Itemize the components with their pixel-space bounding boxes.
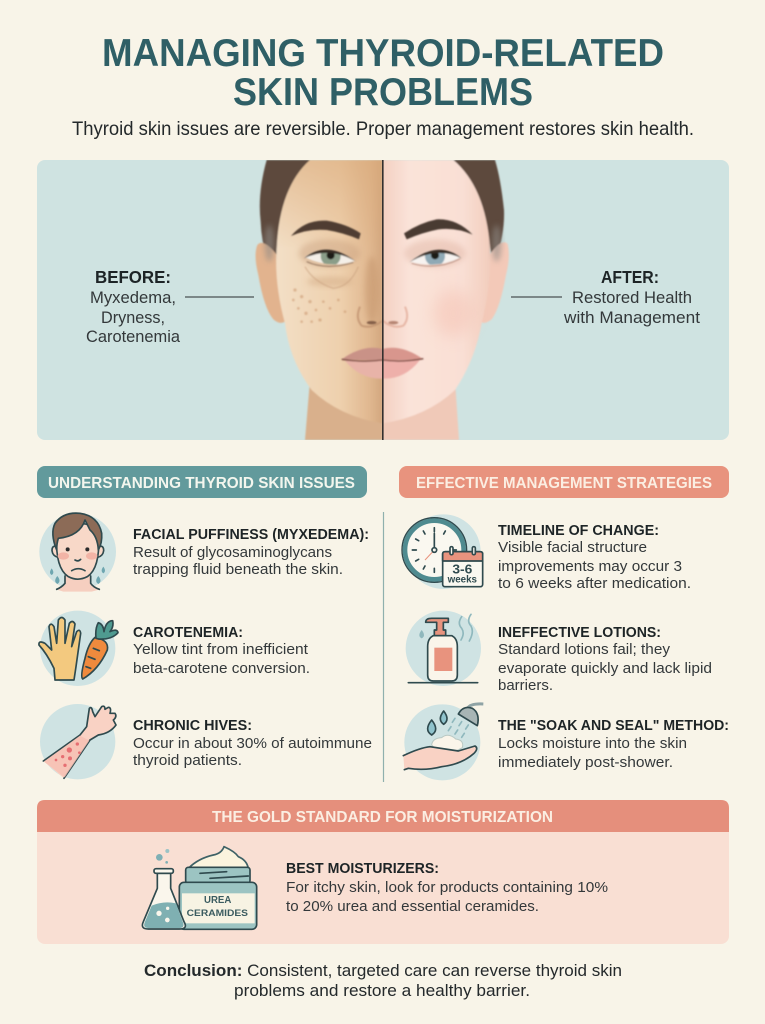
subtitle: Thyroid skin issues are reversible. Proper management restores skin health. bbox=[72, 118, 694, 140]
icon: clock and calendar bbox=[402, 514, 483, 589]
before label: BEFORE: bbox=[95, 267, 171, 287]
text: carotenemia: Yellow tint from inefficient bbox=[133, 641, 309, 658]
text: ineffective lotions: Standard lotions fail; they bbox=[498, 641, 671, 658]
text: ineffective lotions: evaporate quickly and lack lipid bbox=[498, 660, 712, 677]
text: soak and seal method bbox=[498, 718, 729, 771]
text: ineffective lotions: barriers. bbox=[498, 677, 553, 694]
lips bbox=[342, 348, 423, 379]
panel: before and after face comparison bbox=[37, 160, 729, 440]
text: timeline of change: to 6 weeks after medication. bbox=[498, 575, 691, 592]
icon: arm with hives bbox=[40, 704, 116, 779]
heading: understanding thyroid skin issues: UNDERSTANDING THYROID SKIN ISSUES bbox=[48, 475, 355, 492]
column divider bbox=[382, 512, 384, 782]
icon: flask and moisturizer jar bbox=[142, 847, 257, 929]
conclusion: problems and restore a healthy barrier. bbox=[234, 982, 530, 1000]
before label: Carotenemia bbox=[86, 328, 181, 346]
icon: clock and calendar: weeks bbox=[447, 575, 477, 586]
before label bbox=[86, 267, 254, 346]
text: chronic hives bbox=[133, 718, 372, 769]
eyes bbox=[304, 246, 462, 288]
text: facial puffiness: Result of glycosaminoglycans bbox=[133, 544, 332, 561]
panel heading: THE GOLD STANDARD FOR MOISTURIZATION bbox=[212, 809, 553, 826]
text: timeline of change: TIMELINE OF CHANGE: bbox=[498, 523, 659, 539]
shading bbox=[433, 290, 473, 337]
after label: with Management bbox=[563, 309, 700, 327]
icon: flask and moisturizer jar: UREA bbox=[204, 895, 231, 906]
text: best moisturizers: to 20% urea and essential ceramides. bbox=[286, 898, 539, 915]
conclusion bbox=[144, 962, 622, 1000]
before label: Myxedema, bbox=[90, 289, 176, 307]
hair grey highlights bbox=[265, 225, 274, 262]
text: chronic hives: thyroid patients. bbox=[133, 752, 242, 769]
title: MANAGING THYROID-RELATED bbox=[102, 32, 664, 75]
nose bbox=[358, 307, 407, 327]
icon: soak and seal hand under shower bbox=[403, 704, 483, 780]
text: soak and seal method: immediately post-shower. bbox=[498, 754, 673, 771]
icon: yellow hand and carrot bbox=[39, 611, 118, 686]
title bbox=[102, 32, 664, 114]
text: best moisturizers bbox=[286, 861, 608, 915]
text: ineffective lotions: INEFFECTIVE LOTIONS: bbox=[498, 625, 661, 641]
text: soak and seal method: Locks moisture into the skin bbox=[498, 735, 687, 752]
text: best moisturizers: For itchy skin, look for products containing 10% bbox=[286, 879, 608, 896]
freckles bbox=[292, 288, 346, 323]
text: timeline of change: improvements may occur 3 bbox=[498, 558, 682, 575]
after label: AFTER: bbox=[601, 267, 659, 287]
heading: effective management strategies bbox=[399, 466, 729, 498]
icon: flask and moisturizer jar: CERAMIDES bbox=[187, 908, 248, 918]
text: timeline of change bbox=[498, 523, 691, 592]
title: SKIN PROBLEMS bbox=[233, 71, 533, 114]
text: carotenemia: beta-carotene conversion. bbox=[133, 660, 310, 677]
text: soak and seal method: THE "SOAK AND SEAL" METHOD: bbox=[498, 718, 729, 734]
icon: puffy face bbox=[39, 513, 116, 592]
text: facial puffiness: FACIAL PUFFINESS (MYXEDEMA): bbox=[133, 527, 369, 543]
conclusion: Conclusion: Consistent, targeted care can reverse thyroid skin bbox=[144, 962, 622, 980]
text: chronic hives: Occur in about 30% of autoimmune bbox=[133, 735, 372, 752]
after label bbox=[511, 267, 700, 327]
after label: Restored Health bbox=[572, 289, 692, 307]
text: facial puffiness bbox=[133, 527, 369, 578]
face illustration bbox=[256, 160, 509, 440]
icon: lotion bottle bbox=[406, 611, 481, 686]
heading: effective management strategies: EFFECTIVE MANAGEMENT STRATEGIES bbox=[416, 475, 712, 492]
text: timeline of change: Visible facial structure bbox=[498, 539, 647, 556]
panel: gold standard for moisturization bbox=[37, 800, 729, 944]
text: carotenemia bbox=[133, 625, 310, 677]
text: ineffective lotions bbox=[498, 625, 712, 694]
eyebrows bbox=[291, 219, 473, 239]
text: chronic hives: CHRONIC HIVES: bbox=[133, 718, 252, 734]
text: carotenemia: CAROTENEMIA: bbox=[133, 625, 243, 641]
heading: understanding thyroid skin issues bbox=[37, 466, 367, 498]
text: facial puffiness: trapping fluid beneath the skin. bbox=[133, 561, 343, 578]
center divider line bbox=[382, 160, 384, 440]
icon: clock and calendar: 3-6 bbox=[452, 561, 472, 576]
before label: Dryness, bbox=[101, 309, 165, 327]
text: best moisturizers: BEST MOISTURIZERS: bbox=[286, 861, 439, 877]
